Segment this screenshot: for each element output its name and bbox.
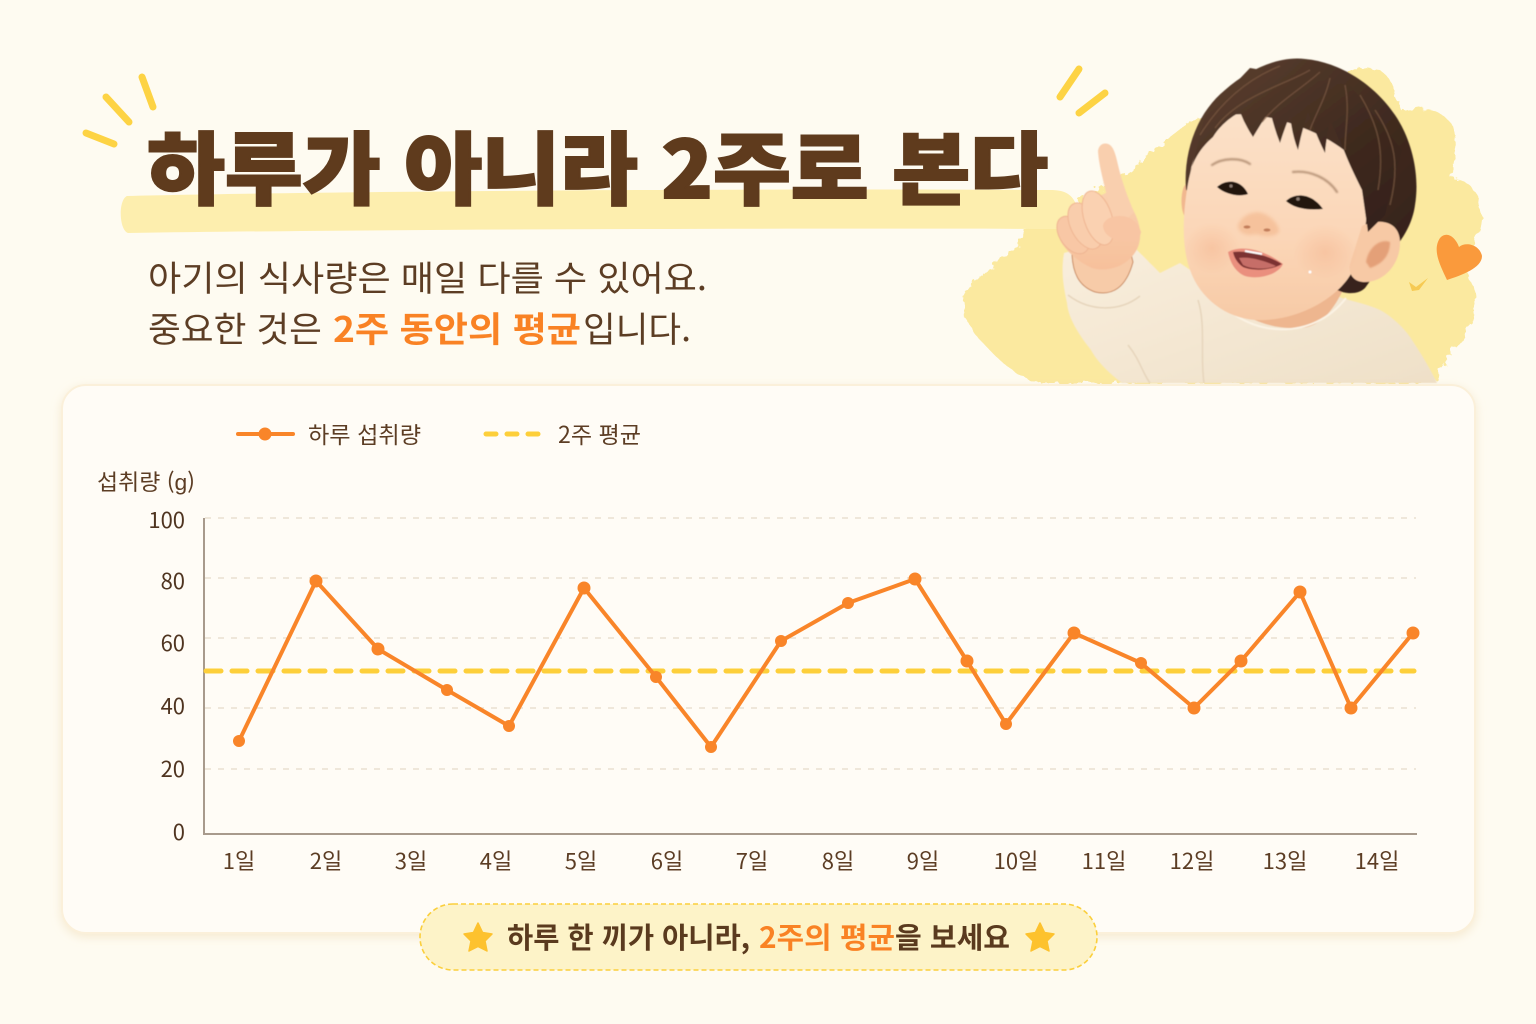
baby index finger [1098,143,1134,220]
callout pill [420,904,1097,970]
x axis labels: 9일 [907,844,939,876]
callout text: 2주의 평균 [759,915,895,957]
y axis labels [148,503,185,847]
callout text: 을 보세요 [895,915,1010,957]
legend: daily intake: 하루 섭취량 [308,416,421,450]
x axis labels: 4일 [480,844,512,876]
x axis labels: 7일 [736,844,768,876]
subtitle [148,251,707,353]
chart: line graph [148,503,1420,876]
subtitle: 입니다. [583,302,691,353]
y axis labels: 20 [161,752,185,784]
data points [233,572,1420,753]
baby face [1184,114,1367,320]
x axis labels: 11일 [1082,844,1126,876]
baby eyes [1217,182,1323,209]
y axis title: 섭취량 (g) [97,465,195,497]
baby eyebrows [1212,159,1337,192]
baby hair back [1186,59,1416,293]
x axis labels: 5일 [565,844,597,876]
daily intake line [239,579,1413,747]
callout text [507,915,1010,957]
baby thumb [1103,216,1141,242]
baby cheeks [1184,222,1357,280]
baby fringe [1186,68,1402,232]
y axis labels: 80 [161,564,185,596]
legend: two-week average: 2주 평균 [558,416,641,450]
x axis labels: 1일 [223,844,255,876]
y axis labels: 100 [148,503,185,535]
baby collar [1222,298,1346,329]
background paint blob behind baby [963,67,1482,383]
baby nose [1238,212,1279,236]
icon: orange heart [1437,235,1482,280]
baby drool drop [1308,270,1312,274]
x axis labels: 3일 [395,844,427,876]
y axis labels: 60 [161,626,185,658]
x axis labels: 2일 [310,844,342,876]
x axis labels: 8일 [822,844,854,876]
subtitle: 중요한 것은 [148,302,322,353]
baby hand [1050,143,1141,269]
icon: small heart [1409,278,1428,291]
x axis labels: 13일 [1263,844,1307,876]
title highlight brush stroke [121,189,1076,233]
x axis labels: 14일 [1355,844,1399,876]
y axis labels: 0 [173,815,185,847]
baby shirt [1063,247,1437,383]
decorative rays: right [1060,69,1105,113]
baby curled fingers [1050,187,1120,260]
x axis labels: 10일 [994,844,1038,876]
baby sleeve fold [1068,295,1204,383]
baby left ear [1182,184,1192,218]
panel: chart card [62,385,1475,933]
baby illustration [1050,59,1437,383]
title: 하루가 아니라 2주로 본다 [147,106,1048,221]
icon: star right [1026,923,1054,951]
subtitle: 2주 동안의 평균 [333,302,581,353]
x axis labels: 12일 [1170,844,1214,876]
icon: star left [464,923,492,951]
callout text: 하루 한 끼가 아니라, [507,915,750,957]
baby mouth [1228,248,1283,277]
decorative rays: left [86,77,153,144]
x axis labels [223,844,1399,876]
baby neck [1225,270,1342,328]
baby palm [1060,192,1140,269]
baby forearm [1072,250,1133,293]
baby right ear [1350,222,1400,282]
x axis labels: 6일 [651,844,683,876]
legend: daily intake [238,416,421,450]
baby hair strands [1200,66,1395,205]
average dashed line [206,668,1414,674]
subtitle: 아기의 식사량은 매일 다를 수 있어요. [148,251,707,302]
y axis labels: 40 [161,689,185,721]
